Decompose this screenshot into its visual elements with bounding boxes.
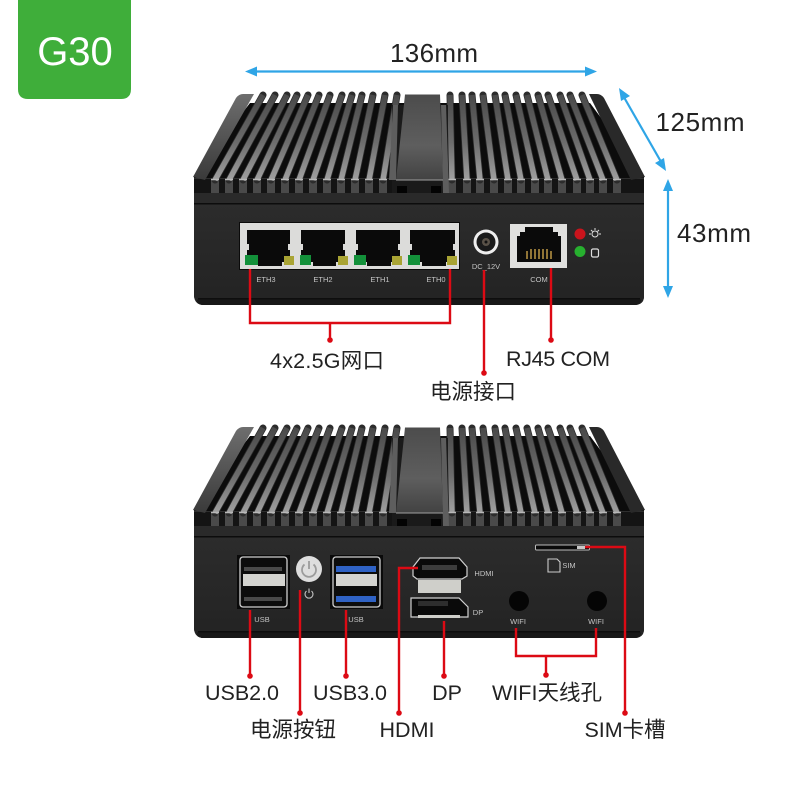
ethernet ports: ETH2 — [313, 275, 333, 284]
RJ45 COM port — [510, 224, 567, 284]
leader: SIM slot — [584, 547, 666, 742]
DC power jack: DC_12V — [472, 262, 500, 271]
RJ45 COM port: COM — [530, 275, 548, 284]
leader: power jack: 电源接口 — [430, 380, 516, 404]
badge: G30: G30 — [37, 30, 113, 74]
DisplayPort port: DP — [473, 608, 483, 617]
leader: power button: 电源按钮 — [250, 718, 336, 742]
DC power jack — [472, 230, 500, 271]
ethernet ports: ETH3 — [256, 275, 276, 284]
dimension: depth 125mm: 125mm — [656, 107, 744, 137]
USB 3.0 ports: USB — [348, 615, 364, 624]
leader: DP — [432, 621, 462, 705]
leader: HDMI — [380, 568, 434, 742]
leader: 4x2.5G network ports — [250, 269, 450, 373]
USB 2.0 ports — [237, 555, 290, 624]
leader: USB2.0 — [205, 610, 279, 705]
WiFi antenna holes: WIFI — [510, 617, 526, 626]
leader: WiFi antenna holes — [492, 628, 602, 705]
device: front view — [193, 94, 645, 305]
leader: power jack — [430, 270, 516, 404]
SIM slot — [536, 545, 590, 572]
WiFi antenna holes: WIFI — [588, 617, 604, 626]
leader: DP: DP — [432, 681, 462, 705]
status LEDs — [574, 228, 601, 257]
leader: 4x2.5G network ports: 4x2.5G网口 — [270, 349, 384, 373]
DisplayPort port — [411, 598, 483, 618]
ethernet ports: ETH1 — [370, 275, 390, 284]
dimension: width 136mm — [245, 38, 597, 76]
leader: WiFi antenna holes: WIFI天线孔 — [492, 681, 602, 705]
leader: RJ45 COM: RJ45 COM — [506, 347, 610, 371]
leader: SIM slot: SIM卡槽 — [584, 718, 666, 742]
leader: USB3.0: USB3.0 — [313, 681, 387, 705]
USB 2.0 ports: USB — [254, 615, 270, 624]
leader: HDMI: HDMI — [380, 718, 434, 742]
badge: G30 — [18, 0, 131, 99]
leader: USB3.0 — [313, 610, 387, 705]
HDMI port: HDMI — [474, 569, 494, 578]
SIM slot: SIM — [562, 561, 576, 570]
WiFi antenna holes — [509, 591, 607, 626]
HDMI port — [413, 558, 494, 593]
power button — [296, 556, 322, 598]
leader: power button — [250, 590, 336, 742]
leader: USB2.0: USB2.0 — [205, 681, 279, 705]
dimension: depth 125mm — [619, 88, 744, 171]
dimension: height 43mm: 43mm — [677, 218, 751, 248]
ethernet ports: ETH0 — [426, 275, 446, 284]
device: rear view — [193, 427, 645, 638]
dimension: height 43mm — [663, 179, 751, 298]
USB 3.0 ports — [330, 555, 383, 624]
dimension: width 136mm: 136mm — [390, 38, 478, 68]
leader: RJ45 COM — [506, 268, 610, 371]
ethernet ports — [239, 222, 460, 284]
